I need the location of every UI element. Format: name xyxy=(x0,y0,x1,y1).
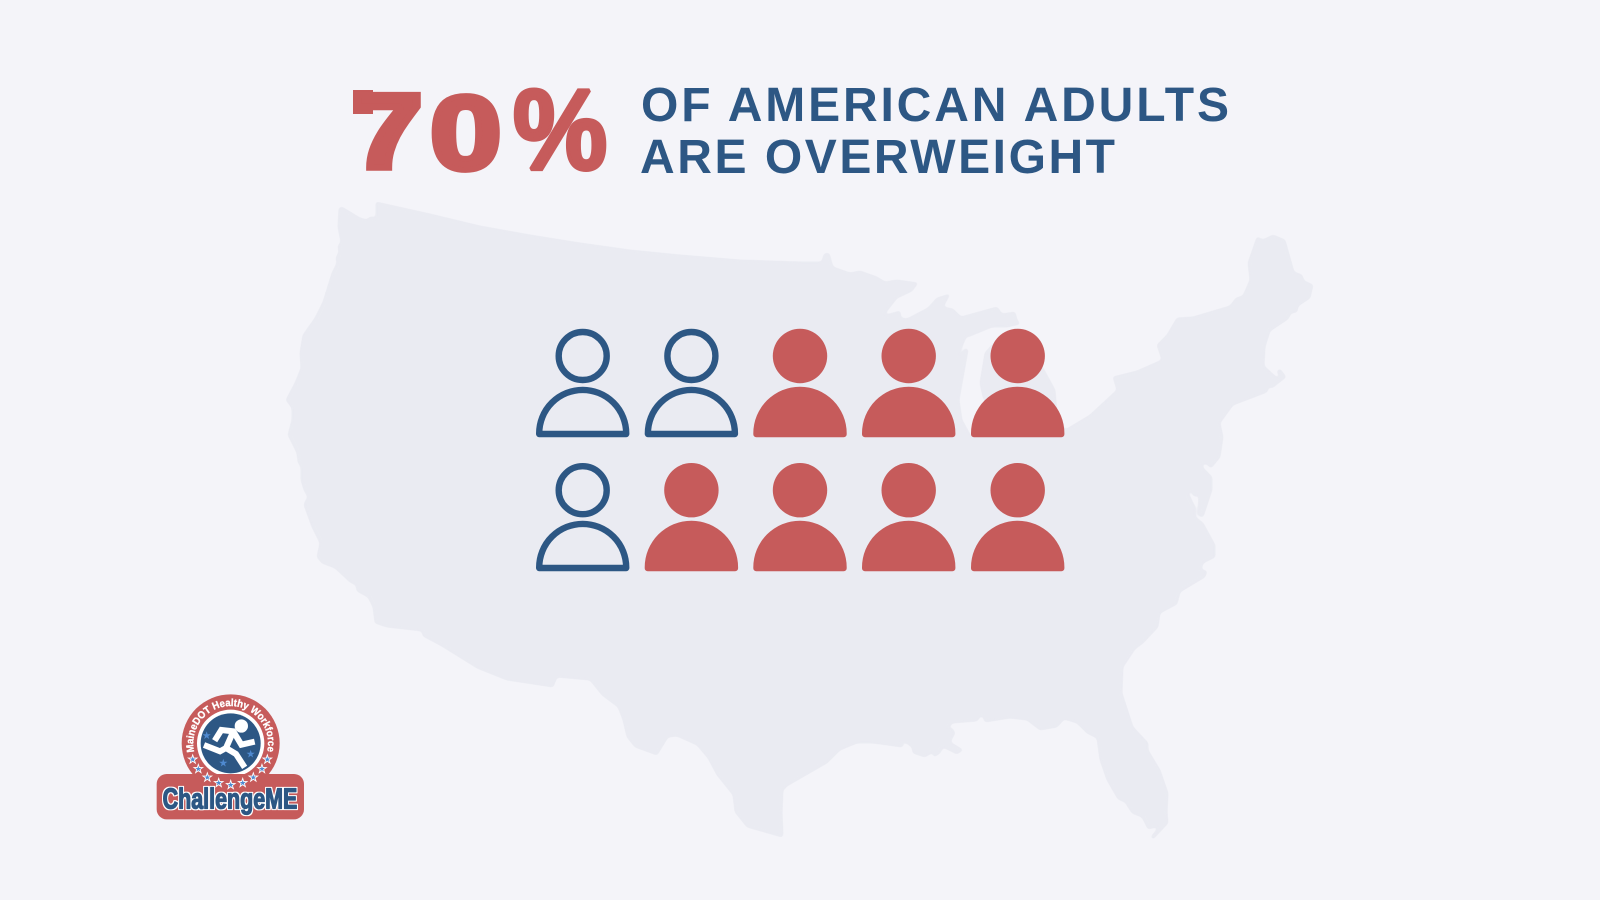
headline text xyxy=(640,79,1229,184)
logo: ChallengeME xyxy=(156,694,304,820)
background map of the United States xyxy=(286,202,1313,839)
logo star arc: ★ xyxy=(264,755,271,764)
person filled row 2 col 3 xyxy=(753,463,847,571)
logo star arc: ★ xyxy=(239,778,246,787)
person outline row 2 col 1 xyxy=(539,466,626,568)
logo star arc: ★ xyxy=(250,773,257,782)
big statistic: 70%: 7 xyxy=(352,73,422,190)
person filled row 1 col 4 xyxy=(862,329,955,437)
person outline row 1 col 1 xyxy=(539,332,626,434)
title xyxy=(352,66,1229,194)
person outline row 1 col 2 xyxy=(648,332,735,434)
logo star arc: ★ xyxy=(204,773,211,782)
logo star arc: ★ xyxy=(195,765,202,774)
person filled row 1 col 3 xyxy=(753,329,847,437)
logo stars in circle: ★ xyxy=(219,757,228,770)
big statistic: 70%: % xyxy=(513,66,607,194)
logo banner xyxy=(157,774,304,819)
icon: running figure xyxy=(204,719,255,767)
headline text: OF AMERICAN ADULTS xyxy=(641,79,1229,132)
headline text: ARE OVERWEIGHT xyxy=(640,131,1115,184)
person filled row 2 col 5 xyxy=(971,463,1064,571)
person filled row 2 col 2 xyxy=(645,463,738,571)
logo star arc: ★ xyxy=(227,781,234,790)
logo star arc: ★ xyxy=(189,755,196,764)
logo arc text: MaineDOT Healthy Workforce xyxy=(186,698,274,752)
logo wordmark: ChallengeME xyxy=(163,784,297,816)
person filled row 2 col 4 xyxy=(862,463,955,571)
logo star arc xyxy=(189,755,271,790)
person filled row 1 col 5 xyxy=(971,329,1064,437)
pictogram: 3 of 10 outlined, 7 of 10 filled xyxy=(539,329,1064,571)
logo stars in circle xyxy=(202,729,255,770)
logo stars in circle: ★ xyxy=(246,747,255,760)
big statistic: 70% xyxy=(352,66,607,194)
logo stars in circle: ★ xyxy=(202,729,211,742)
logo star arc: ★ xyxy=(258,765,266,774)
logo badge circle xyxy=(182,694,280,792)
big statistic: 70%: 0 xyxy=(430,74,502,191)
logo star arc: ★ xyxy=(215,778,222,787)
